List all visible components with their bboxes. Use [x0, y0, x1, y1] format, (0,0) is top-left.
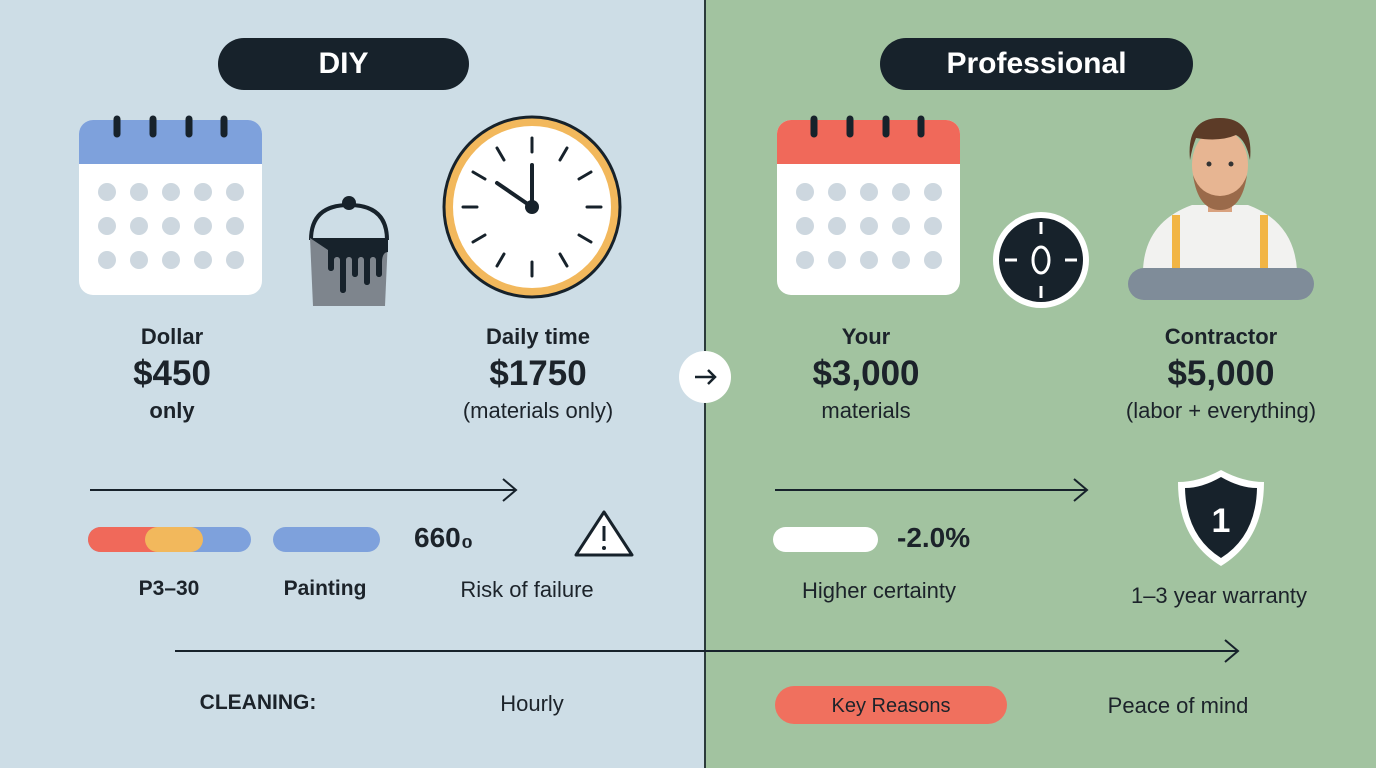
arrow: long bottom: [175, 640, 1238, 662]
label: P3-30: P3–30: [139, 577, 199, 600]
text: Dollar $450 only: Dollar: [141, 324, 203, 349]
icon: blue calendar: [79, 119, 262, 295]
progress bars DIY: [88, 527, 380, 552]
pill: Key Reasons: [775, 686, 1007, 724]
icon: center arrow circle: [679, 351, 731, 403]
heading: DIY: DIY: [318, 47, 368, 80]
label: CLEANING: CLEANING:: [200, 691, 316, 714]
panel: DIY background: [0, 0, 705, 768]
label: warranty: 1–3 year warranty: [1131, 583, 1307, 608]
divider line: [704, 0, 706, 768]
text: Dollar $450 only: [133, 324, 211, 423]
text: Daily time $1750: $1750: [489, 354, 587, 393]
label: Painting: Painting: [284, 577, 366, 600]
label: Higher certainty: Higher certainty: [802, 578, 956, 603]
label: Risk of failure: Risk of failure: [460, 577, 594, 602]
label: Peace of mind: Peace of mind: [1108, 693, 1248, 718]
stat: 660: 660₀: [414, 522, 473, 553]
icon: shield warranty: [1178, 470, 1264, 566]
text: Your $3,000: [812, 324, 920, 423]
text: Your $3,000: materials: [821, 398, 911, 423]
label: Hourly: Hourly: [500, 691, 564, 716]
icon: warning triangle: [576, 512, 632, 555]
text: Your $3,000: $3,000: [812, 354, 920, 393]
heading: Professional: [880, 38, 1193, 90]
text: Daily time $1750: [463, 324, 613, 423]
text: Contractor $5,000: (labor + everything): [1126, 398, 1316, 423]
text: Contractor $5,000: $5,000: [1167, 354, 1275, 393]
arrow: Professional upper: [775, 479, 1087, 501]
icon: red calendar: [777, 119, 960, 295]
pill: Key Reasons: Key Reasons: [832, 695, 950, 717]
icon: target dial: [993, 212, 1089, 308]
white pill bar: [773, 527, 878, 552]
text: Daily time $1750: (materials only): [463, 398, 613, 423]
text: Contractor $5,000: Contractor: [1165, 324, 1277, 349]
heading: Professional: Professional: [946, 47, 1127, 80]
text: Contractor $5,000: [1126, 324, 1316, 423]
icon: shield warranty: 1: [1212, 502, 1230, 540]
text: Daily time $1750: Daily time: [486, 324, 590, 349]
stat: -2.0%: -2.0%: [897, 522, 970, 553]
text: Dollar $450 only: $450: [133, 354, 211, 393]
icon: contractor person: [1128, 118, 1314, 300]
text: Dollar $450 only: only: [149, 398, 195, 423]
heading: DIY: [218, 38, 469, 90]
icon: clock: [444, 117, 620, 297]
text: Your $3,000: Your: [842, 324, 890, 349]
arrow: DIY upper: [90, 479, 516, 501]
icon: paint bucket: [310, 196, 388, 306]
panel: Professional background: [705, 0, 1376, 768]
